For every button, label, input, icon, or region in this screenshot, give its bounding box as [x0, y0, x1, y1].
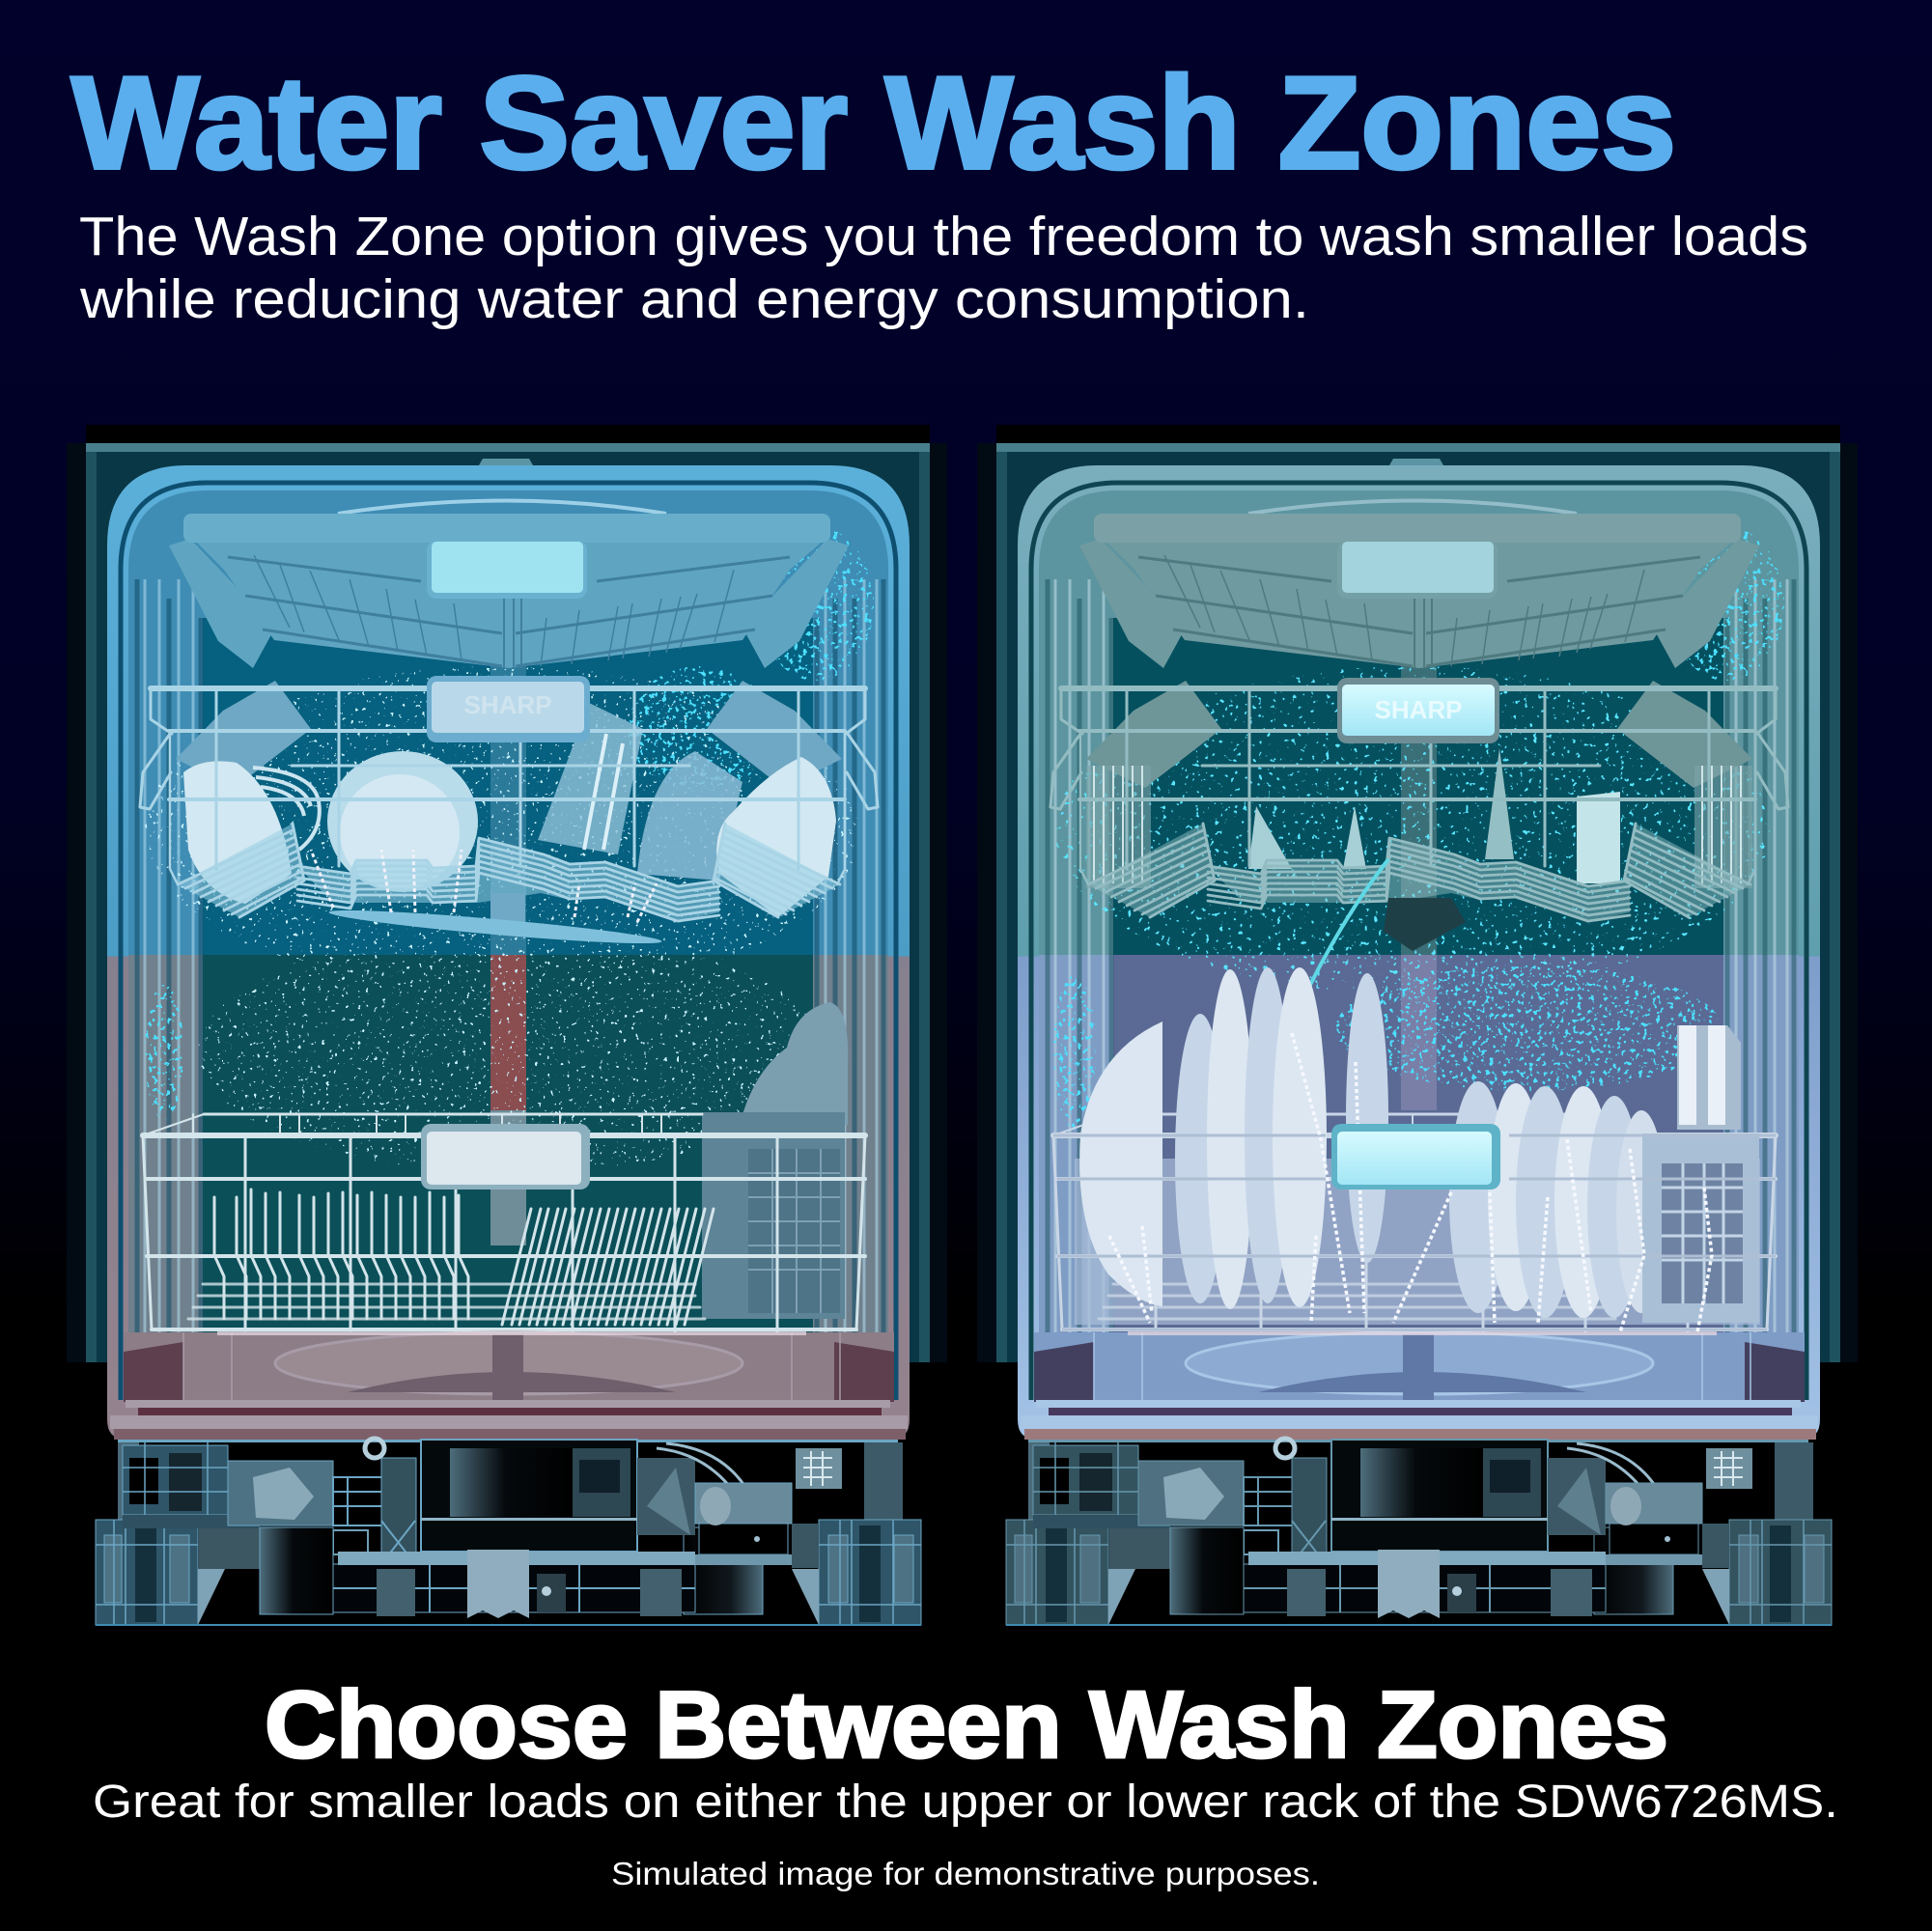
upper spray tray	[1079, 514, 1759, 668]
water droplets	[1053, 526, 1784, 1130]
glass highlights	[584, 734, 623, 850]
back wall lower	[1113, 955, 1723, 1336]
top arc	[338, 500, 666, 514]
tub	[1018, 465, 1820, 1439]
mug handles	[253, 768, 320, 850]
upper rack fins and sliver items	[1086, 748, 1752, 888]
spray hub	[1384, 898, 1466, 951]
disclaimer: Simulated image for demonstrative purposes.	[611, 1856, 1320, 1891]
cutlery	[1677, 1025, 1741, 1130]
bowl	[1079, 1021, 1162, 1306]
lower rack handle	[421, 1124, 590, 1189]
dishwasher: upper zone active	[67, 425, 947, 1625]
bowl right	[716, 757, 836, 917]
glass bowl	[637, 751, 742, 881]
supporting text: Great for smaller loads on either the upper or lower rack of the SDW6726MS.	[93, 1777, 1838, 1828]
side stripes	[137, 579, 883, 1332]
tub cavity	[1039, 490, 1799, 1400]
upper spray label	[427, 541, 587, 599]
water jets	[1109, 1033, 1712, 1332]
bowl left	[183, 761, 292, 904]
back wall upper	[1113, 618, 1723, 955]
lower rack handle	[1331, 1124, 1500, 1189]
plates left	[1175, 967, 1388, 1309]
upper spray label	[1337, 541, 1498, 599]
lower dish backdrop	[1075, 1159, 1760, 1325]
machine base	[96, 1439, 921, 1625]
upper rack handle	[427, 676, 590, 742]
lower rack tines	[214, 1189, 714, 1325]
intro text: The Wash Zone option gives you the freedom to wash smaller loads	[79, 206, 1808, 267]
upper rack handle: SHARP	[463, 690, 552, 719]
dish baskets behind	[176, 681, 842, 788]
subheading: Choose Between Wash Zones	[265, 1671, 1668, 1777]
title: Water Saver Wash Zones	[71, 49, 1676, 196]
upper rack	[1050, 688, 1788, 922]
utensil basket	[702, 1112, 845, 1319]
center pillar behind rack	[490, 1110, 526, 1245]
center pillar	[1401, 618, 1437, 955]
water droplets	[145, 526, 874, 1173]
plate	[327, 751, 478, 892]
plates right	[1449, 1081, 1666, 1318]
door frame	[67, 425, 947, 1362]
dishwasher: lower zone active	[977, 425, 1858, 1625]
back wall upper	[203, 618, 813, 955]
tub cavity	[128, 490, 888, 1400]
intro text: while reducing water and energy consumption.	[79, 268, 1309, 330]
machine base	[1006, 1439, 1832, 1625]
upper rack handle: SHARP	[1375, 695, 1462, 724]
side stripes	[1048, 579, 1794, 1332]
upper spray tray	[169, 514, 849, 668]
sump	[1021, 1331, 1818, 1440]
back wall lower	[203, 955, 813, 1336]
utensil basket	[1642, 1133, 1759, 1323]
tub	[107, 465, 910, 1439]
door frame	[977, 425, 1858, 1362]
dish baskets behind	[1086, 681, 1752, 788]
spray jet	[1292, 859, 1388, 1023]
sump	[110, 1331, 908, 1440]
intro text	[79, 206, 1808, 330]
center pillar	[490, 618, 526, 955]
jets	[311, 850, 657, 922]
lower cavity sides	[128, 955, 888, 1341]
lower rack	[1053, 1114, 1776, 1336]
glass	[538, 703, 643, 854]
lower rack	[143, 1114, 865, 1336]
upper rack handle	[1337, 678, 1499, 743]
upper rack	[140, 688, 878, 922]
lower cavity sides	[1039, 955, 1799, 1341]
utensil basket seat	[740, 1002, 848, 1125]
gasket line	[121, 483, 896, 1400]
spray arm	[328, 893, 662, 949]
top arc	[1248, 500, 1577, 514]
gasket line	[1031, 483, 1806, 1400]
center pillar lower	[490, 955, 526, 1110]
front rack rails over dishes	[1053, 1135, 1776, 1329]
center pillar lower	[1401, 955, 1437, 1110]
